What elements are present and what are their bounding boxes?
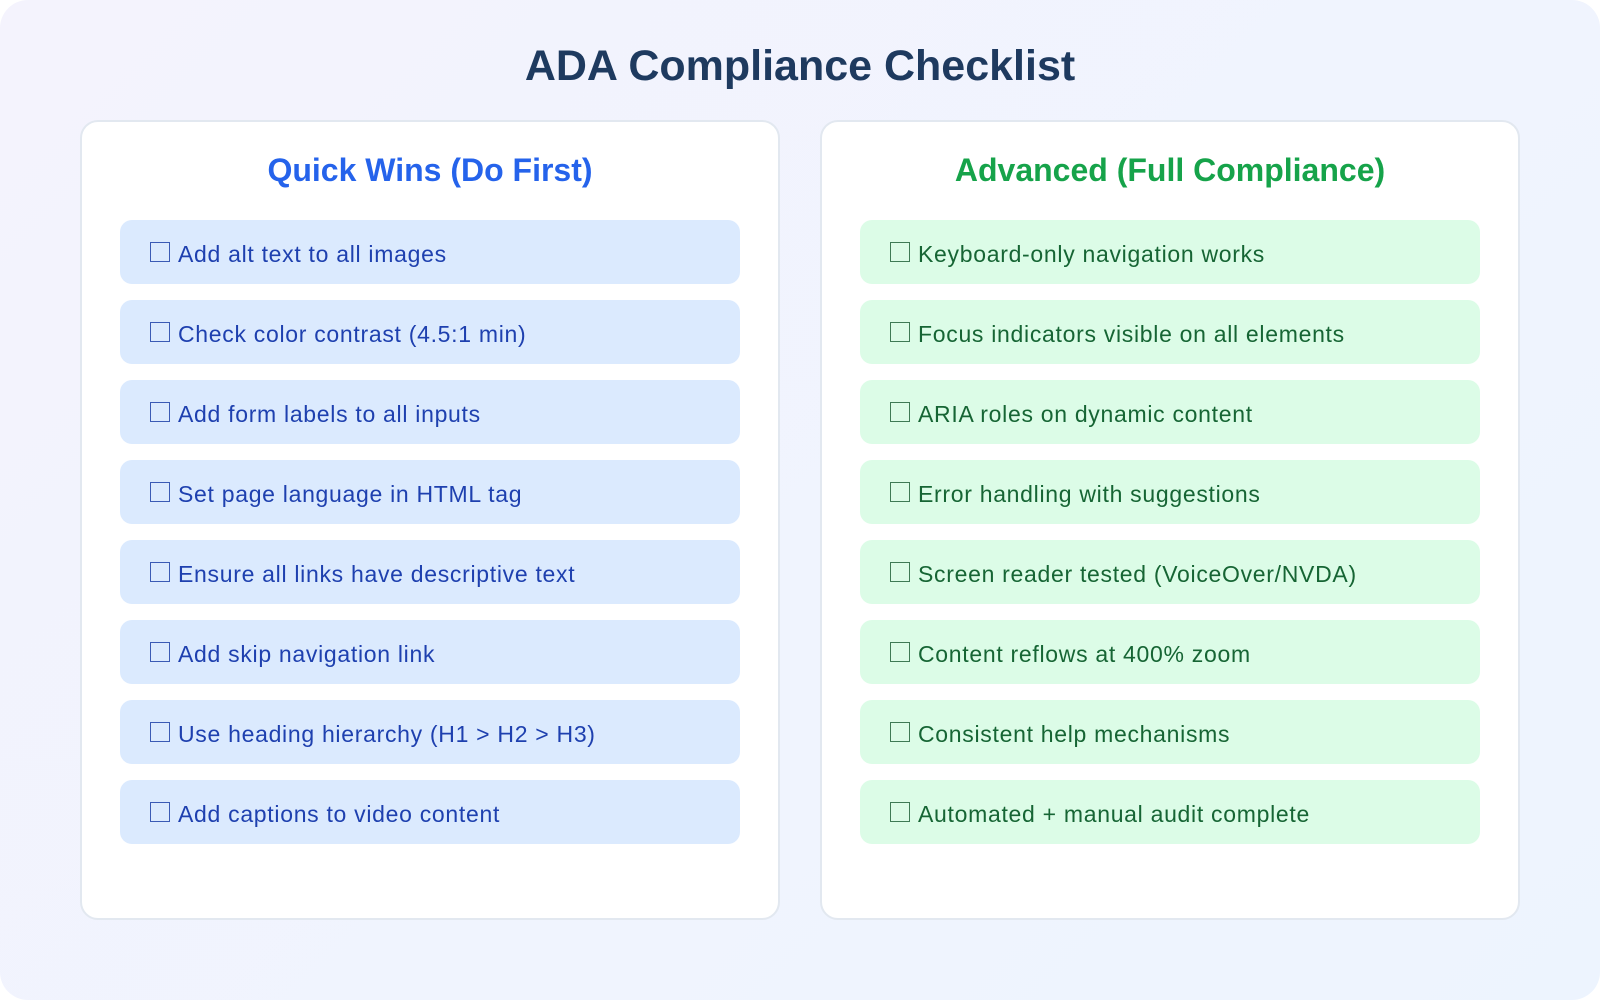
title: ADA Compliance Checklist [525,42,1075,90]
item: Use heading hierarchy (H1 > H2 > H3) [178,721,596,747]
item: Error handling with suggestions [918,481,1261,507]
panel: quick wins [80,120,780,920]
item: Add skip navigation link [178,641,435,667]
item [860,300,1480,364]
item [860,220,1480,284]
item [120,540,740,604]
item [120,780,740,844]
item [120,220,740,284]
item: Consistent help mechanisms [918,721,1230,747]
heading: advanced: Advanced (Full Compliance) [955,152,1385,188]
item: Keyboard-only navigation works [918,241,1265,267]
heading: quick wins: Quick Wins (Do First) [267,152,593,188]
item: Add alt text to all images [178,241,447,267]
item: Screen reader tested (VoiceOver/NVDA) [918,561,1357,587]
item [860,700,1480,764]
item [120,460,740,524]
item: Focus indicators visible on all elements [918,321,1345,347]
panel: advanced [820,120,1520,920]
item: Check color contrast (4.5:1 min) [178,321,526,347]
item: Ensure all links have descriptive text [178,561,575,587]
item [860,380,1480,444]
item: Set page language in HTML tag [178,481,522,507]
item [120,300,740,364]
item: Automated + manual audit complete [918,801,1310,827]
item [120,700,740,764]
item: Content reflows at 400% zoom [918,641,1251,667]
item: Add captions to video content [178,801,500,827]
item [120,380,740,444]
item: ARIA roles on dynamic content [918,401,1253,427]
item [860,540,1480,604]
item [120,620,740,684]
item [860,460,1480,524]
item [860,780,1480,844]
item: Add form labels to all inputs [178,401,481,427]
item [860,620,1480,684]
